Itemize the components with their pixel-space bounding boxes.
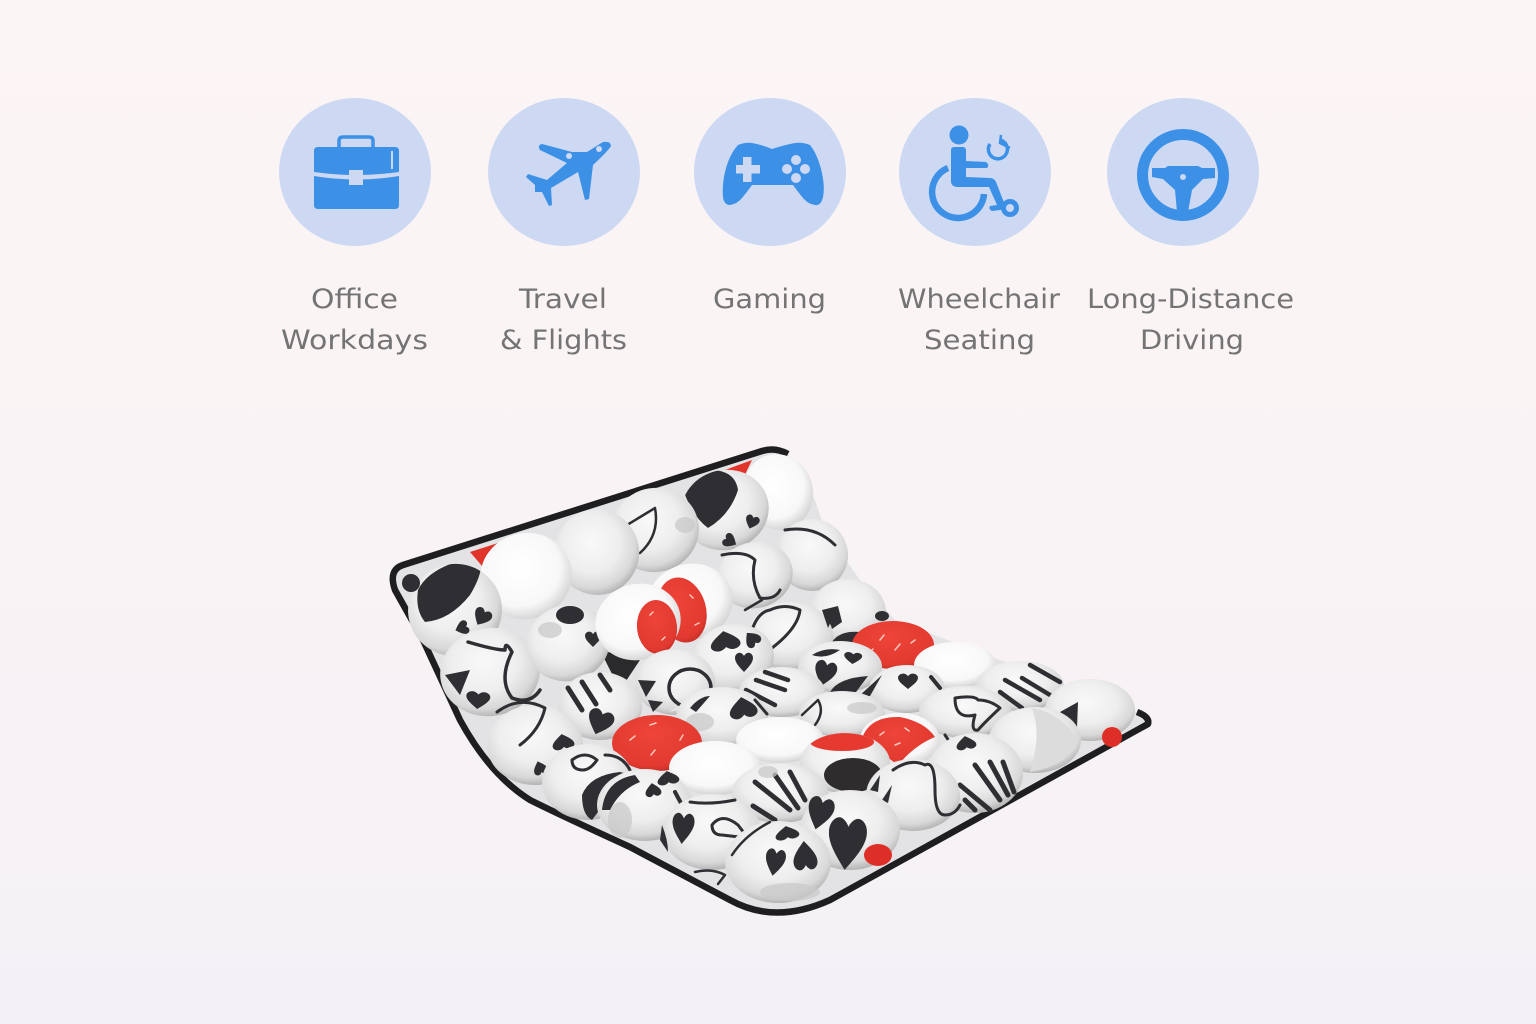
icon: game controller [694,98,846,246]
usage icons row [279,98,1259,246]
label: Wheelchair Seating [898,284,1061,356]
top row of bubbles [402,454,814,655]
label: Travel & Flights: Travel [518,284,607,315]
label: Long-Distance Driving: Long-Distance [1087,284,1294,315]
icon: steering wheel [1107,98,1259,246]
third row of bubbles [487,579,886,785]
usage labels [281,284,1294,356]
fifth row of bubbles [542,713,1023,823]
cushion base mat [393,450,1148,912]
label: Office Workdays [281,284,428,356]
icon: airplane [488,98,640,246]
label: Wheelchair Seating: Seating [924,325,1035,356]
label: Wheelchair Seating: Wheelchair [898,284,1061,315]
icon: wheelchair user [899,98,1051,246]
infographic canvas [279,98,1292,916]
label: Long-Distance Driving [1087,284,1294,356]
front row of bubbles [597,759,960,903]
second row of bubbles [433,519,848,724]
product: bubble seat cushion [393,446,1148,912]
cushion black border [393,450,1148,912]
label: Gaming: Gaming [713,284,826,315]
fourth row of bubbles [676,611,1135,773]
label: Office Workdays: Workdays [281,325,428,356]
icon: office briefcase [279,98,431,246]
label: Travel & Flights: & Flights [500,325,627,356]
label: Long-Distance Driving: Driving [1140,325,1244,356]
label: Office Workdays: Office [311,284,398,315]
label: Travel & Flights [500,284,627,356]
